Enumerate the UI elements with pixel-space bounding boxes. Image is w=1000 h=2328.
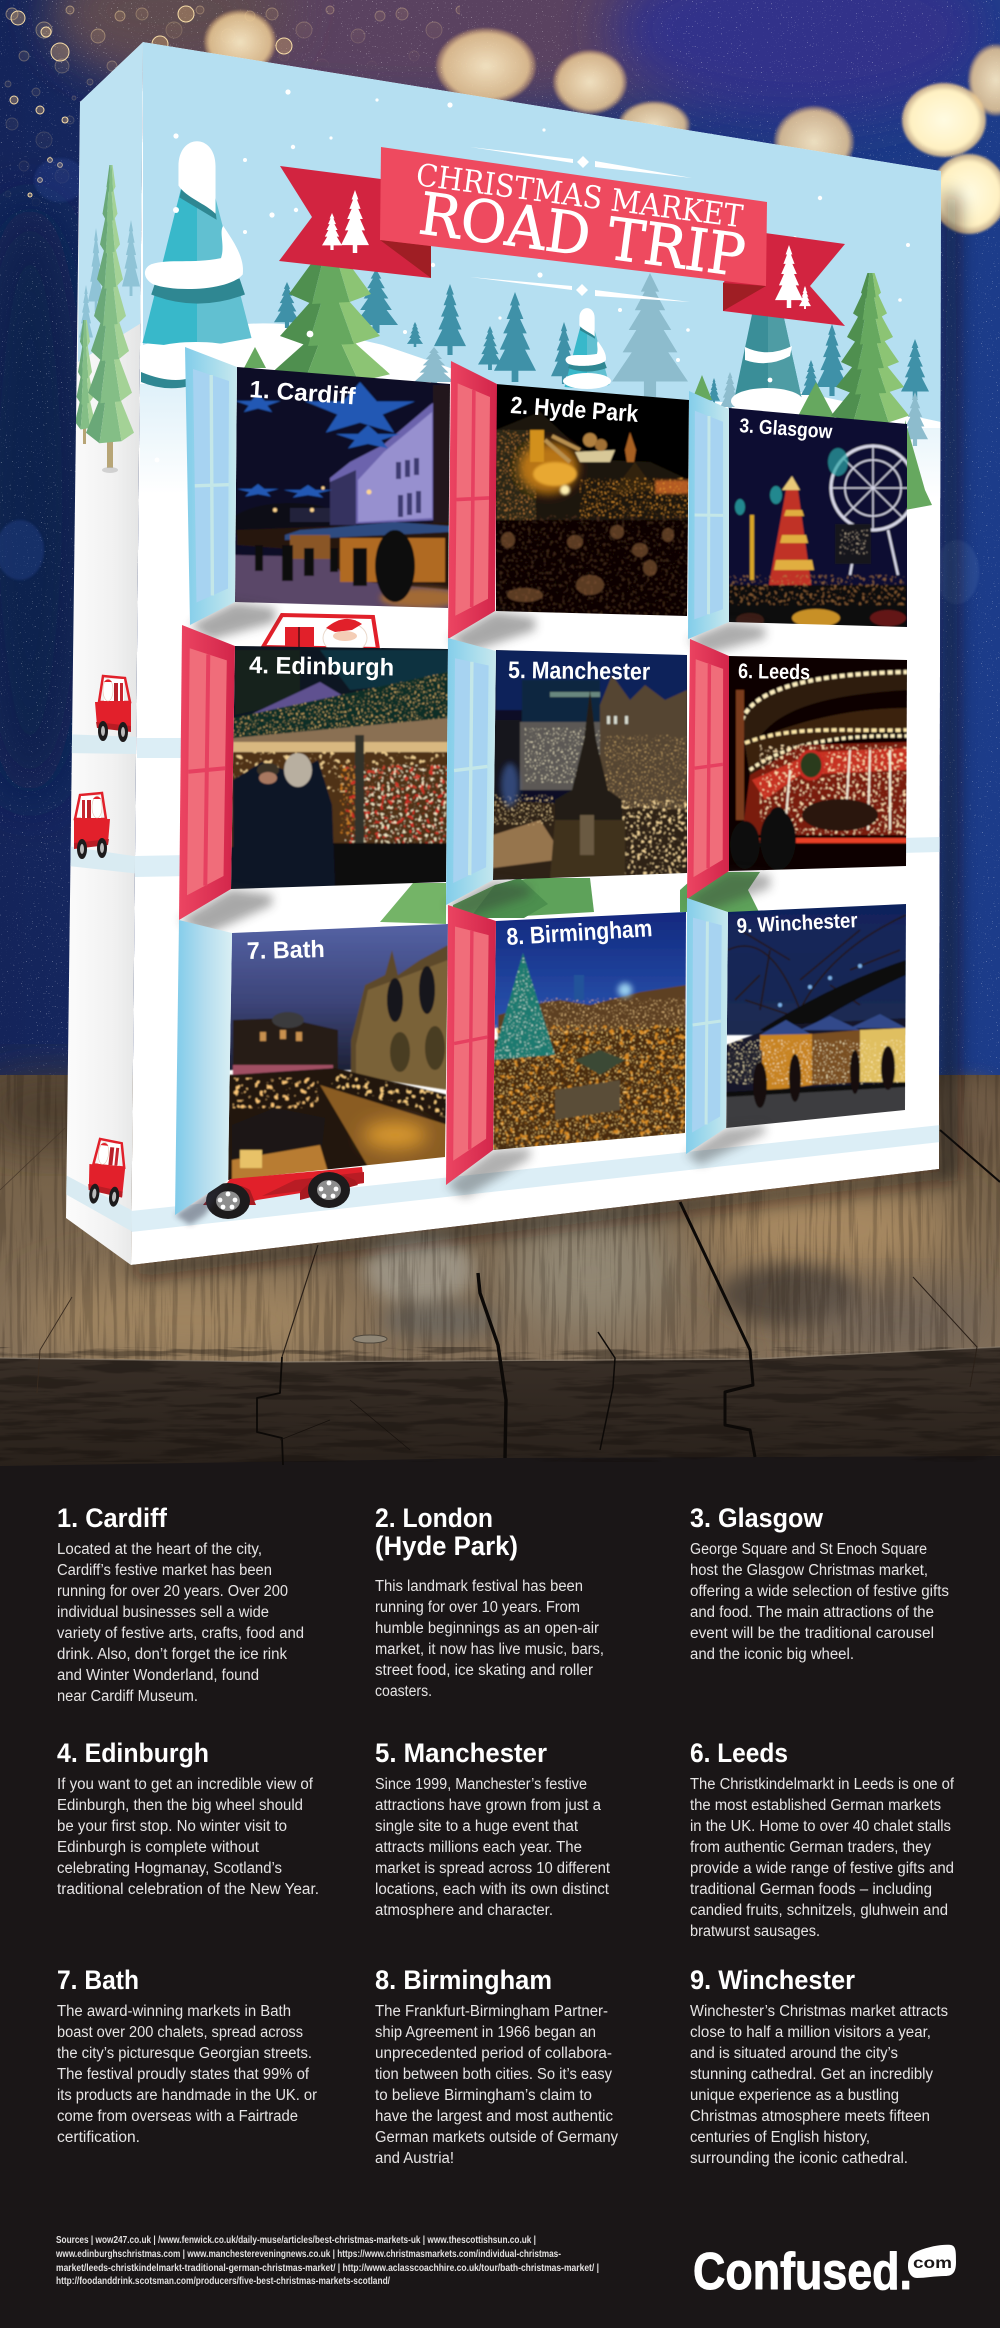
- item 5: Manchester: Since 1999, Manchester’s festive: [375, 1776, 587, 1793]
- item 9: Winchester: Christmas atmosphere meets fifteen: [690, 2108, 930, 2125]
- item 6: Leeds: in the UK. Home to over 40 chalet stalls: [690, 1818, 951, 1835]
- item 4: Edinburgh: traditional celebration of the New Year.: [57, 1881, 319, 1898]
- night sky background with bokeh: [0, 0, 1000, 1090]
- item 9: Winchester: unique experience as a bustling: [690, 2087, 899, 2104]
- item 6: Leeds: from authentic German traders, they: [690, 1839, 931, 1856]
- label: 9. Winchester: 9. Winchester: [736, 909, 858, 938]
- item 7: Bath: its products are handmade in the UK. or: [57, 2087, 317, 2104]
- door shadow 1: [190, 602, 275, 640]
- item 5: Manchester: [375, 1738, 611, 1919]
- item 8: Birmingham: [375, 1965, 618, 2167]
- item 8: Birmingham: and Austria!: [375, 2150, 454, 2167]
- box shadow: [128, 190, 958, 1278]
- side pale band 1: [72, 734, 136, 754]
- door 8: [446, 905, 496, 1185]
- door 9: [686, 898, 728, 1154]
- door shadow 5: [446, 880, 530, 918]
- item 7: Bath: [57, 1965, 317, 2146]
- pale ribbon bands: [131, 1125, 941, 1232]
- item 3: Glasgow: offering a wide selection of festive gifts: [690, 1583, 949, 1600]
- advent calendar box: front face: [131, 42, 943, 1265]
- item 3: Glasgow: and food. The main attractions of the: [690, 1604, 934, 1621]
- item 7: Bath: The award-winning markets in Bath: [57, 2003, 291, 2020]
- photo: Glasgow: [725, 404, 915, 630]
- wooden table: [0, 1075, 1000, 1506]
- window 1: Cardiff: [185, 347, 460, 640]
- item 3: Glasgow: and the iconic big wheel.: [690, 1646, 854, 1663]
- item 4: Edinburgh: Edinburgh is complete without: [57, 1839, 260, 1856]
- door shadow 8: [446, 1148, 530, 1198]
- winter sky: [143, 42, 941, 422]
- red car roof above Edinburgh: [263, 615, 378, 654]
- item 8: Birmingham: The Frankfurt-Birmingham Partner-: [375, 2003, 608, 2020]
- photo: Edinburgh: [228, 642, 453, 892]
- item 3: Glasgow: 3. Glasgow: [690, 1503, 824, 1533]
- label: 6. Leeds: 6. Leeds: [738, 660, 810, 684]
- door shadow 3: [688, 622, 765, 655]
- item 7: Bath: the city’s picturesque Georgian streets.: [57, 2045, 312, 2062]
- item 9: Winchester: and is situated around the city’s: [690, 2045, 898, 2062]
- item 5: Manchester: atmosphere and character.: [375, 1902, 553, 1919]
- ribbon main band: [380, 147, 767, 286]
- item 2: London: street food, ice skating and roller: [375, 1662, 593, 1679]
- snowy teal tree: left: [138, 141, 254, 388]
- door 2: [448, 361, 497, 639]
- item 3: Glasgow: [690, 1503, 949, 1663]
- green tiered tree: right: [831, 273, 932, 510]
- item 9: Winchester: [690, 1965, 948, 2167]
- icon: pine trees left: [322, 190, 369, 253]
- side trees: [75, 165, 140, 473]
- door shadow 4: [179, 889, 272, 935]
- snowflakes: [155, 89, 910, 462]
- door shadow 2: [448, 611, 535, 652]
- item 1: Cardiff: near Cardiff Museum.: [57, 1688, 198, 1705]
- item 2: London: market, it now has live music, bars,: [375, 1641, 604, 1658]
- item 1: Cardiff: Located at the heart of the city,: [57, 1541, 262, 1558]
- item 6: Leeds: the most established German markets: [690, 1797, 941, 1814]
- item 4: Edinburgh: 4. Edinburgh: [57, 1738, 209, 1768]
- door shadow 6: [687, 871, 770, 912]
- door 4: [179, 625, 235, 920]
- item 8: Birmingham: 8. Birmingham: [375, 1965, 552, 1995]
- green tree pieces between rows: [380, 872, 760, 924]
- item 4: Edinburgh: celebrating Hogmanay, Scotland’s: [57, 1860, 282, 1877]
- title ribbon: [279, 147, 845, 326]
- item 5: Manchester: attracts millions each year. The: [375, 1839, 582, 1856]
- label: 7. Bath: 7. Bath: [246, 936, 325, 965]
- side pale band 3: [66, 1176, 132, 1231]
- red toy car: [203, 1167, 364, 1219]
- sources: http://foodanddrink.scotsman.com/producers/five-best-christmas-markets-scotland/: [56, 2276, 390, 2287]
- item 8: Birmingham: to believe Birmingham’s claim to: [375, 2087, 592, 2104]
- photo: Manchester: [490, 648, 690, 883]
- item 6: Leeds: candied fruits, schnitzels, gluhwein and: [690, 1902, 948, 1919]
- item 7: Bath: come from overseas with a Fairtrade: [57, 2108, 298, 2125]
- window 7: Bath: [175, 920, 451, 1225]
- table front edge: [0, 1347, 1000, 1466]
- item 6: Leeds: [690, 1738, 955, 1940]
- sources: Sources | wow247.co.uk | /www.fenwick.co.uk/daily-muse/articles/best-christmas-markets-uk | www.thescottishsun.co.uk |: [56, 2235, 536, 2246]
- item 7: Bath: certification.: [57, 2129, 140, 2146]
- window 5: Manchester: [446, 638, 690, 918]
- logo: Confused.com: Confused.: [693, 2243, 912, 2301]
- item 2: London: [375, 1503, 604, 1700]
- item 4: Edinburgh: be your first stop. No winter visit to: [57, 1818, 287, 1835]
- item 7: Bath: 7. Bath: [57, 1965, 139, 1995]
- title: Christmas Market: CHRISTMAS MARKET: [414, 157, 745, 235]
- item 8: Birmingham: have the largest and most authentic: [375, 2108, 613, 2125]
- item 1: Cardiff: [57, 1503, 304, 1705]
- sources: [55, 2235, 599, 2287]
- item 1: Cardiff: Cardiff’s festive market has been: [57, 1562, 272, 1579]
- item 8: Birmingham: German markets outside of Germany: [375, 2129, 618, 2146]
- advent calendar box: side face: [66, 42, 143, 1265]
- label: 8. Birmingham: 8. Birmingham: [506, 915, 653, 951]
- window 8: Birmingham: [446, 905, 690, 1198]
- item 1: Cardiff: individual businesses sell a wide: [57, 1604, 269, 1621]
- door 6: [687, 639, 729, 899]
- item 5: Manchester: market is spread across 10 different: [375, 1860, 611, 1877]
- item 1: Cardiff: running for over 20 years. Over 200: [57, 1583, 288, 1600]
- window 6: Leeds: [687, 639, 911, 912]
- item 5: Manchester: single site to a huge event that: [375, 1818, 579, 1835]
- item 2: London: 2. London: [375, 1503, 493, 1533]
- window 3: Glasgow: [688, 391, 915, 655]
- door shadow 7: [175, 1180, 228, 1225]
- item 7: Bath: boast over 200 chalets, spread across: [57, 2024, 303, 2041]
- door 3: [688, 391, 729, 639]
- label: 4. Edinburgh: 4. Edinburgh: [249, 652, 394, 682]
- door 1: [185, 347, 237, 625]
- title: Road Trip: ROAD TRIP: [415, 179, 749, 290]
- window 4: Edinburgh: [179, 625, 453, 935]
- ribbon right tail: [723, 233, 845, 326]
- item 4: Edinburgh: If you want to get an incredible view of: [57, 1776, 314, 1793]
- item 1: Cardiff: drink. Also, don’t forget the ice rink: [57, 1646, 287, 1663]
- item 3: Glasgow: host the Glasgow Christmas market,: [690, 1562, 928, 1579]
- side pale band 2: [70, 846, 135, 874]
- item 8: Birmingham: tion between both cities. So it’s easy: [375, 2066, 612, 2083]
- item 5: Manchester: locations, each with its own distinct: [375, 1881, 610, 1898]
- item 2: London: This landmark festival has been: [375, 1578, 583, 1595]
- sources: www.edinburghschristmas.com | www.manchestereveningnews.co.uk | https://www.christmasmarkets.com/individual-christmas-: [55, 2249, 561, 2260]
- item 6: Leeds: traditional German foods – including: [690, 1881, 932, 1898]
- icon: pine trees right: [775, 245, 811, 309]
- photo: Bath: [225, 920, 451, 1185]
- label: 1. Cardiff: 1. Cardiff: [249, 376, 357, 410]
- logo: Confused.com: com: [913, 2255, 952, 2272]
- item 6: Leeds: bratwurst sausages.: [690, 1923, 820, 1940]
- item 3: Glasgow: George Square and St Enoch Square: [690, 1541, 927, 1558]
- item 6: Leeds: 6. Leeds: [690, 1738, 788, 1768]
- photo: Cardiff: [235, 367, 450, 608]
- window 2: Hyde Park: [448, 361, 695, 652]
- item 8: Birmingham: ship Agreement in 1966 began an: [375, 2024, 596, 2041]
- small green trees: [244, 347, 835, 418]
- photo: Birmingham: [490, 908, 690, 1152]
- item 3: Glasgow: event will be the traditional carousel: [690, 1625, 934, 1642]
- item 5: Manchester: attractions have grown from just a: [375, 1797, 601, 1814]
- photo: Winchester: [722, 900, 910, 1130]
- door 5: [446, 638, 496, 905]
- dark text panel: [0, 1466, 1000, 2328]
- item 6: Leeds: The Christkindelmarkt in Leeds is one of: [690, 1776, 955, 1793]
- item 4: Edinburgh: [57, 1738, 319, 1898]
- item 1: Cardiff: variety of festive arts, crafts, food and: [57, 1625, 304, 1642]
- item 1: Cardiff: 1. Cardiff: [57, 1503, 168, 1533]
- item 2: London: humble beginnings as an open-air: [375, 1620, 599, 1637]
- window 9: Winchester: [686, 898, 910, 1165]
- label: 2. Hyde Park: 2. Hyde Park: [510, 392, 640, 428]
- ornament below title: [470, 277, 690, 302]
- door shadow 9: [686, 1125, 765, 1165]
- item 6: Leeds: provide a wide range of festive gifts and: [690, 1860, 954, 1877]
- snowy teal tree: right: [731, 314, 802, 407]
- item 9: Winchester: Winchester’s Christmas market attracts: [690, 2003, 948, 2020]
- item 9: Winchester: 9. Winchester: [690, 1965, 855, 1995]
- item 9: Winchester: close to half a million visitors a year,: [690, 2024, 931, 2041]
- item 9: Winchester: stunning cathedral. Get an incredibly: [690, 2066, 933, 2083]
- green tiered tree: centre: [274, 264, 390, 378]
- photo: Hyde Park: [490, 380, 695, 620]
- item 7: Bath: The festival proudly states that 99% of: [57, 2066, 310, 2083]
- item 2: London: (Hyde Park): [375, 1531, 518, 1561]
- background pine trees: [274, 269, 929, 446]
- door 7: [175, 920, 232, 1215]
- sources: market/leeds-christkindelmarkt-traditional-german-christmas-market/ | http://www.aclasscoachhire.co.uk/tour/bath-christmas-market/ |: [56, 2263, 599, 2274]
- item 9: Winchester: surrounding the iconic cathedral.: [690, 2150, 908, 2167]
- item 5: Manchester: 5. Manchester: [375, 1738, 547, 1768]
- photo: Leeds: [725, 652, 911, 874]
- item 2: London: coasters.: [375, 1683, 432, 1700]
- item 4: Edinburgh: Edinburgh, then the big wheel should: [57, 1797, 303, 1814]
- label: 5. Manchester: 5. Manchester: [508, 657, 650, 686]
- icon: side cars: [74, 676, 131, 1208]
- item 9: Winchester: centuries of English history,: [690, 2129, 870, 2146]
- item 2: London: running for over 10 years. From: [375, 1599, 580, 1616]
- ornament above title: [470, 147, 692, 178]
- label: 3. Glasgow: 3. Glasgow: [739, 415, 833, 444]
- item 8: Birmingham: unprecedented period of collabora-: [375, 2045, 612, 2062]
- ribbon left tail: [279, 166, 431, 278]
- item 1: Cardiff: and Winter Wonderland, found: [57, 1667, 259, 1684]
- snowy teal tree: middle: [563, 308, 611, 389]
